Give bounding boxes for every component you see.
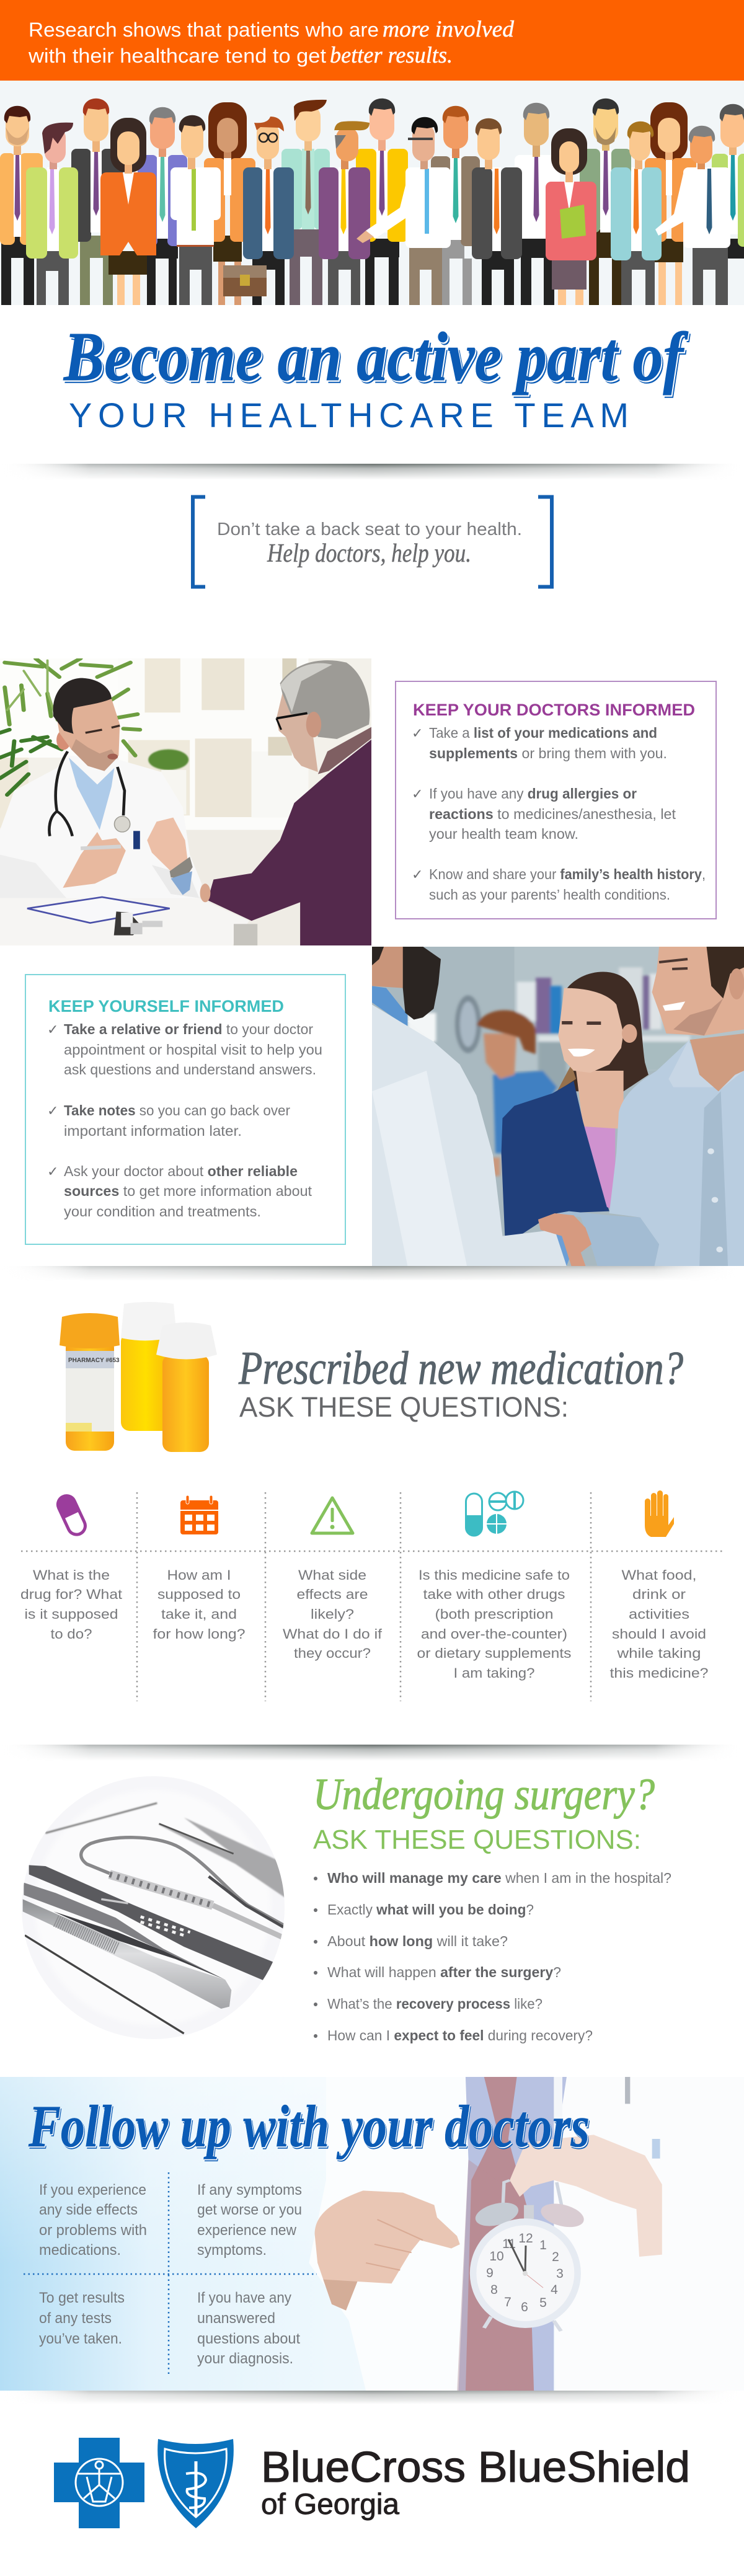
- front bottle: [156, 1322, 217, 1452]
- left bottle: PHARMACY #653: [68, 1357, 120, 1364]
- wordmark: BlueCross BlueShield: [261, 2443, 690, 2491]
- doctor figure: [372, 947, 403, 988]
- icon: calendar: [180, 1495, 218, 1534]
- quote with brackets: [193, 497, 552, 586]
- clock hands: [508, 2239, 543, 2288]
- question 4: take with other drugs: [423, 1587, 565, 1602]
- item 2: [412, 786, 676, 842]
- bullet list: [314, 1870, 671, 2043]
- wordmark region: of Georgia: [261, 2487, 400, 2520]
- person 1: [0, 106, 43, 305]
- bullet list: What’s the recovery process like?: [327, 1996, 542, 2012]
- photo: handshake with doctor: [372, 947, 744, 1266]
- question 3: likely?: [311, 1606, 354, 1622]
- doctor hands: [63, 832, 126, 888]
- photo: doctor and patient: [0, 658, 372, 945]
- doctor head: [56, 732, 69, 750]
- clock body: [501, 2179, 563, 2205]
- title: [63, 319, 690, 435]
- right bracket: [538, 497, 552, 586]
- image: prescription bottles: [60, 1302, 217, 1452]
- patient: [208, 739, 372, 945]
- question 3: [283, 1567, 383, 1661]
- follow-up item 3: [39, 2290, 125, 2347]
- question 2: How am I: [167, 1567, 231, 1583]
- person 14: [472, 118, 522, 305]
- item 3: Ask your doctor about other reliable: [64, 1163, 298, 1179]
- image: surgical instruments: [19, 1773, 291, 2043]
- icon: warning triangle: [312, 1498, 353, 1533]
- item 2: ✓: [47, 1104, 58, 1119]
- question 3: What side: [298, 1567, 366, 1583]
- bullet list: About how long will it take?: [327, 1933, 508, 1949]
- logo: BlueCross BlueShield of Georgia: [54, 2438, 690, 2528]
- person 12 with extended arm: [356, 117, 451, 305]
- question 5: this medicine?: [610, 1665, 708, 1681]
- person 19: [645, 102, 696, 305]
- clock numerals: 3: [556, 2267, 564, 2281]
- item 1: supplements or bring them with you.: [429, 745, 667, 761]
- clock numerals: 4: [551, 2283, 558, 2297]
- person 17: [580, 99, 631, 305]
- dotted dividers: [24, 2172, 317, 2377]
- question 4: I am taking?: [454, 1665, 534, 1681]
- panel: follow up with your doctors: [0, 2077, 662, 2391]
- icon: blue cross: [54, 2438, 144, 2528]
- item 3: your condition and treatments.: [64, 1203, 261, 1219]
- follow-up item 2: symptoms.: [197, 2242, 267, 2259]
- heading script: Undergoing surgery?: [313, 1769, 655, 1819]
- item 2: reactions to medicines/anesthesia, let: [429, 806, 676, 822]
- item 2: important information later.: [64, 1123, 242, 1139]
- heading sub line: ASK THESE QUESTIONS:: [313, 1825, 641, 1855]
- medication questions grid: [21, 1492, 724, 1701]
- bullet list: What will happen after the surgery?: [327, 1964, 561, 1980]
- holding hand: [510, 2135, 662, 2257]
- follow-up item 4: your diagnosis.: [197, 2350, 293, 2367]
- person 13: [431, 106, 480, 305]
- question 5: while taking: [616, 1645, 701, 1661]
- question 2: [153, 1567, 246, 1642]
- person 3: [71, 99, 123, 305]
- question 3: they occur?: [294, 1645, 371, 1661]
- panel: surgery questions: [313, 1769, 671, 2043]
- item 3: ✓: [47, 1164, 58, 1180]
- clock numerals: 8: [490, 2283, 498, 2297]
- intro banner: [0, 0, 744, 81]
- man: [609, 1042, 744, 1266]
- icon: capsule: [55, 1493, 88, 1538]
- item 2: Take notes so you can go back over: [64, 1102, 290, 1118]
- heading: KEEP YOUR DOCTORS INFORMED: [413, 701, 695, 719]
- person 8: [243, 117, 294, 305]
- pointing hand: [315, 2190, 460, 2311]
- clock numerals: 6: [521, 2300, 528, 2314]
- follow-up item 4: If you have any: [197, 2290, 291, 2306]
- question 1: [20, 1567, 122, 1642]
- item 1: ✓: [412, 726, 423, 741]
- follow-up item 2: [197, 2182, 302, 2259]
- question 1: to do?: [51, 1626, 92, 1642]
- item 1: Take a list of your medications and: [429, 725, 657, 741]
- jacket: [502, 1081, 609, 1236]
- question 4: or dietary supplements: [417, 1645, 572, 1661]
- item 3: ✓: [412, 867, 423, 883]
- question 1: What is the: [33, 1567, 110, 1583]
- question 3: effects are: [296, 1587, 368, 1602]
- follow-up item 1: [39, 2182, 147, 2259]
- question 2: take it, and: [161, 1606, 237, 1622]
- back bottle: [121, 1302, 177, 1431]
- person 11: [356, 99, 408, 305]
- item 1: Take a relative or friend to your doctor: [64, 1021, 313, 1037]
- heading script shadow: Follow up with your doctors: [29, 2095, 591, 2161]
- plant: [0, 658, 140, 795]
- intro text line 2: with their healthcare tend to get: [28, 45, 326, 67]
- background photo: doctor with clock: [0, 2077, 662, 2391]
- follow-up item 2: get worse or you: [197, 2202, 302, 2218]
- follow-up item 4: unanswered: [197, 2310, 275, 2327]
- person 21: [712, 104, 744, 259]
- question 5: [610, 1567, 708, 1681]
- person 9: [281, 100, 330, 305]
- item 2: ✓: [412, 787, 423, 802]
- table: [0, 898, 249, 945]
- follow-up item 1: any side effects: [39, 2202, 138, 2218]
- item 1: [47, 1021, 322, 1078]
- person 2: [26, 123, 78, 305]
- bullet list: Exactly what will you be doing?: [327, 1901, 534, 1918]
- question 5: should I avoid: [612, 1626, 706, 1642]
- clock numerals: 10: [489, 2249, 504, 2264]
- icon: pills: [466, 1492, 523, 1536]
- illustration: healthcare team crowd: [0, 81, 744, 305]
- left bottle: [60, 1313, 120, 1451]
- heading sub line: ASK THESE QUESTIONS:: [239, 1391, 569, 1423]
- item 1: [412, 725, 667, 761]
- intro script: more involved: more involved: [383, 17, 515, 42]
- item 3: such as your parents’ health conditions.: [429, 887, 670, 903]
- panel: keep your doctors informed: [396, 681, 716, 919]
- quote line 1: Don’t take a back seat to your health.: [217, 520, 522, 539]
- person 15: [515, 103, 560, 305]
- question 2: supposed to: [157, 1587, 241, 1602]
- follow-up item 2: If any symptoms: [197, 2182, 302, 2198]
- follow-up item 3: of any tests: [39, 2310, 112, 2327]
- item 3: sources to get more information about: [64, 1183, 312, 1199]
- item 2: [47, 1102, 290, 1139]
- question 5: What food,: [621, 1567, 697, 1583]
- follow-up item 1: medications.: [39, 2242, 121, 2259]
- follow-up item 3: To get results: [39, 2290, 125, 2306]
- left bracket: [193, 497, 205, 586]
- intro script: better results: better results.: [330, 43, 453, 68]
- person 18: [611, 122, 662, 305]
- question 3: What do I do if: [283, 1626, 383, 1642]
- person 10: [319, 121, 370, 305]
- person 20: [655, 126, 730, 305]
- person 7: [204, 102, 255, 305]
- doctor coat: [0, 756, 202, 899]
- briefcase: [223, 265, 267, 296]
- item 1: appointment or hospital visit to help you: [64, 1042, 322, 1058]
- follow-up item 2: experience new: [197, 2222, 297, 2239]
- question 4: [417, 1567, 572, 1681]
- clock numerals: 12: [518, 2231, 533, 2246]
- clock numerals: [486, 2231, 564, 2314]
- item 3: [412, 866, 706, 903]
- item 3: Know and share your family’s health history,: [429, 866, 706, 882]
- quote line 2: Help doctors, help you.: [267, 539, 471, 568]
- icon: stop hand: [645, 1490, 674, 1537]
- follow-up item 4: [197, 2290, 300, 2367]
- bullet list: How can I expect to feel during recovery?: [327, 2027, 593, 2043]
- clock numerals: 1: [539, 2238, 547, 2252]
- clock numerals: 5: [539, 2296, 547, 2310]
- question 1: drug for? What: [20, 1587, 122, 1602]
- clock numerals: 2: [552, 2250, 559, 2264]
- question 5: drink or: [632, 1587, 686, 1602]
- follow-up item 4: questions about: [197, 2330, 300, 2347]
- follow-up item 1: If you experience: [39, 2182, 146, 2198]
- heading: KEEP YOURSELF INFORMED: [48, 997, 284, 1016]
- clock numerals: 7: [504, 2295, 512, 2309]
- clock numerals: 9: [486, 2266, 494, 2280]
- icon: blue shield: [157, 2439, 234, 2528]
- question 1: is it supposed: [25, 1606, 118, 1622]
- heading script highlight: Follow up with your doctors: [29, 2094, 590, 2160]
- clock numerals: 11: [502, 2237, 516, 2251]
- item 2: If you have any drug allergies or: [429, 786, 637, 802]
- person 16 with folder: [546, 128, 596, 305]
- person 5: [138, 107, 187, 305]
- question 4: Is this medicine safe to: [418, 1567, 570, 1583]
- person 6: [170, 115, 221, 305]
- heading script main: Follow up with your doctors: [28, 2093, 590, 2159]
- question 4: and over-the-counter): [421, 1626, 567, 1642]
- question 2: for how long?: [153, 1626, 246, 1642]
- question 4: (both prescription: [435, 1606, 553, 1622]
- intro text line 1: Research shows that patients who are: [29, 19, 379, 41]
- panel: keep yourself informed: [25, 975, 345, 1244]
- item 1: ask questions and understand answers.: [64, 1061, 316, 1078]
- item 1: ✓: [47, 1022, 58, 1038]
- item 2: your health team know.: [429, 826, 578, 842]
- person 4: [100, 118, 156, 305]
- title sub line: YOUR HEALTHCARE TEAM: [69, 396, 629, 435]
- question 5: activities: [629, 1606, 689, 1622]
- follow-up item 1: or problems with: [39, 2222, 147, 2239]
- woman: [557, 972, 649, 1091]
- item 3: [47, 1163, 312, 1219]
- bullet list: Who will manage my care when I am in the hospital?: [327, 1870, 671, 1886]
- heading: prescribed new medication: [238, 1342, 683, 1423]
- follow-up item 3: you’ve taken.: [39, 2330, 122, 2347]
